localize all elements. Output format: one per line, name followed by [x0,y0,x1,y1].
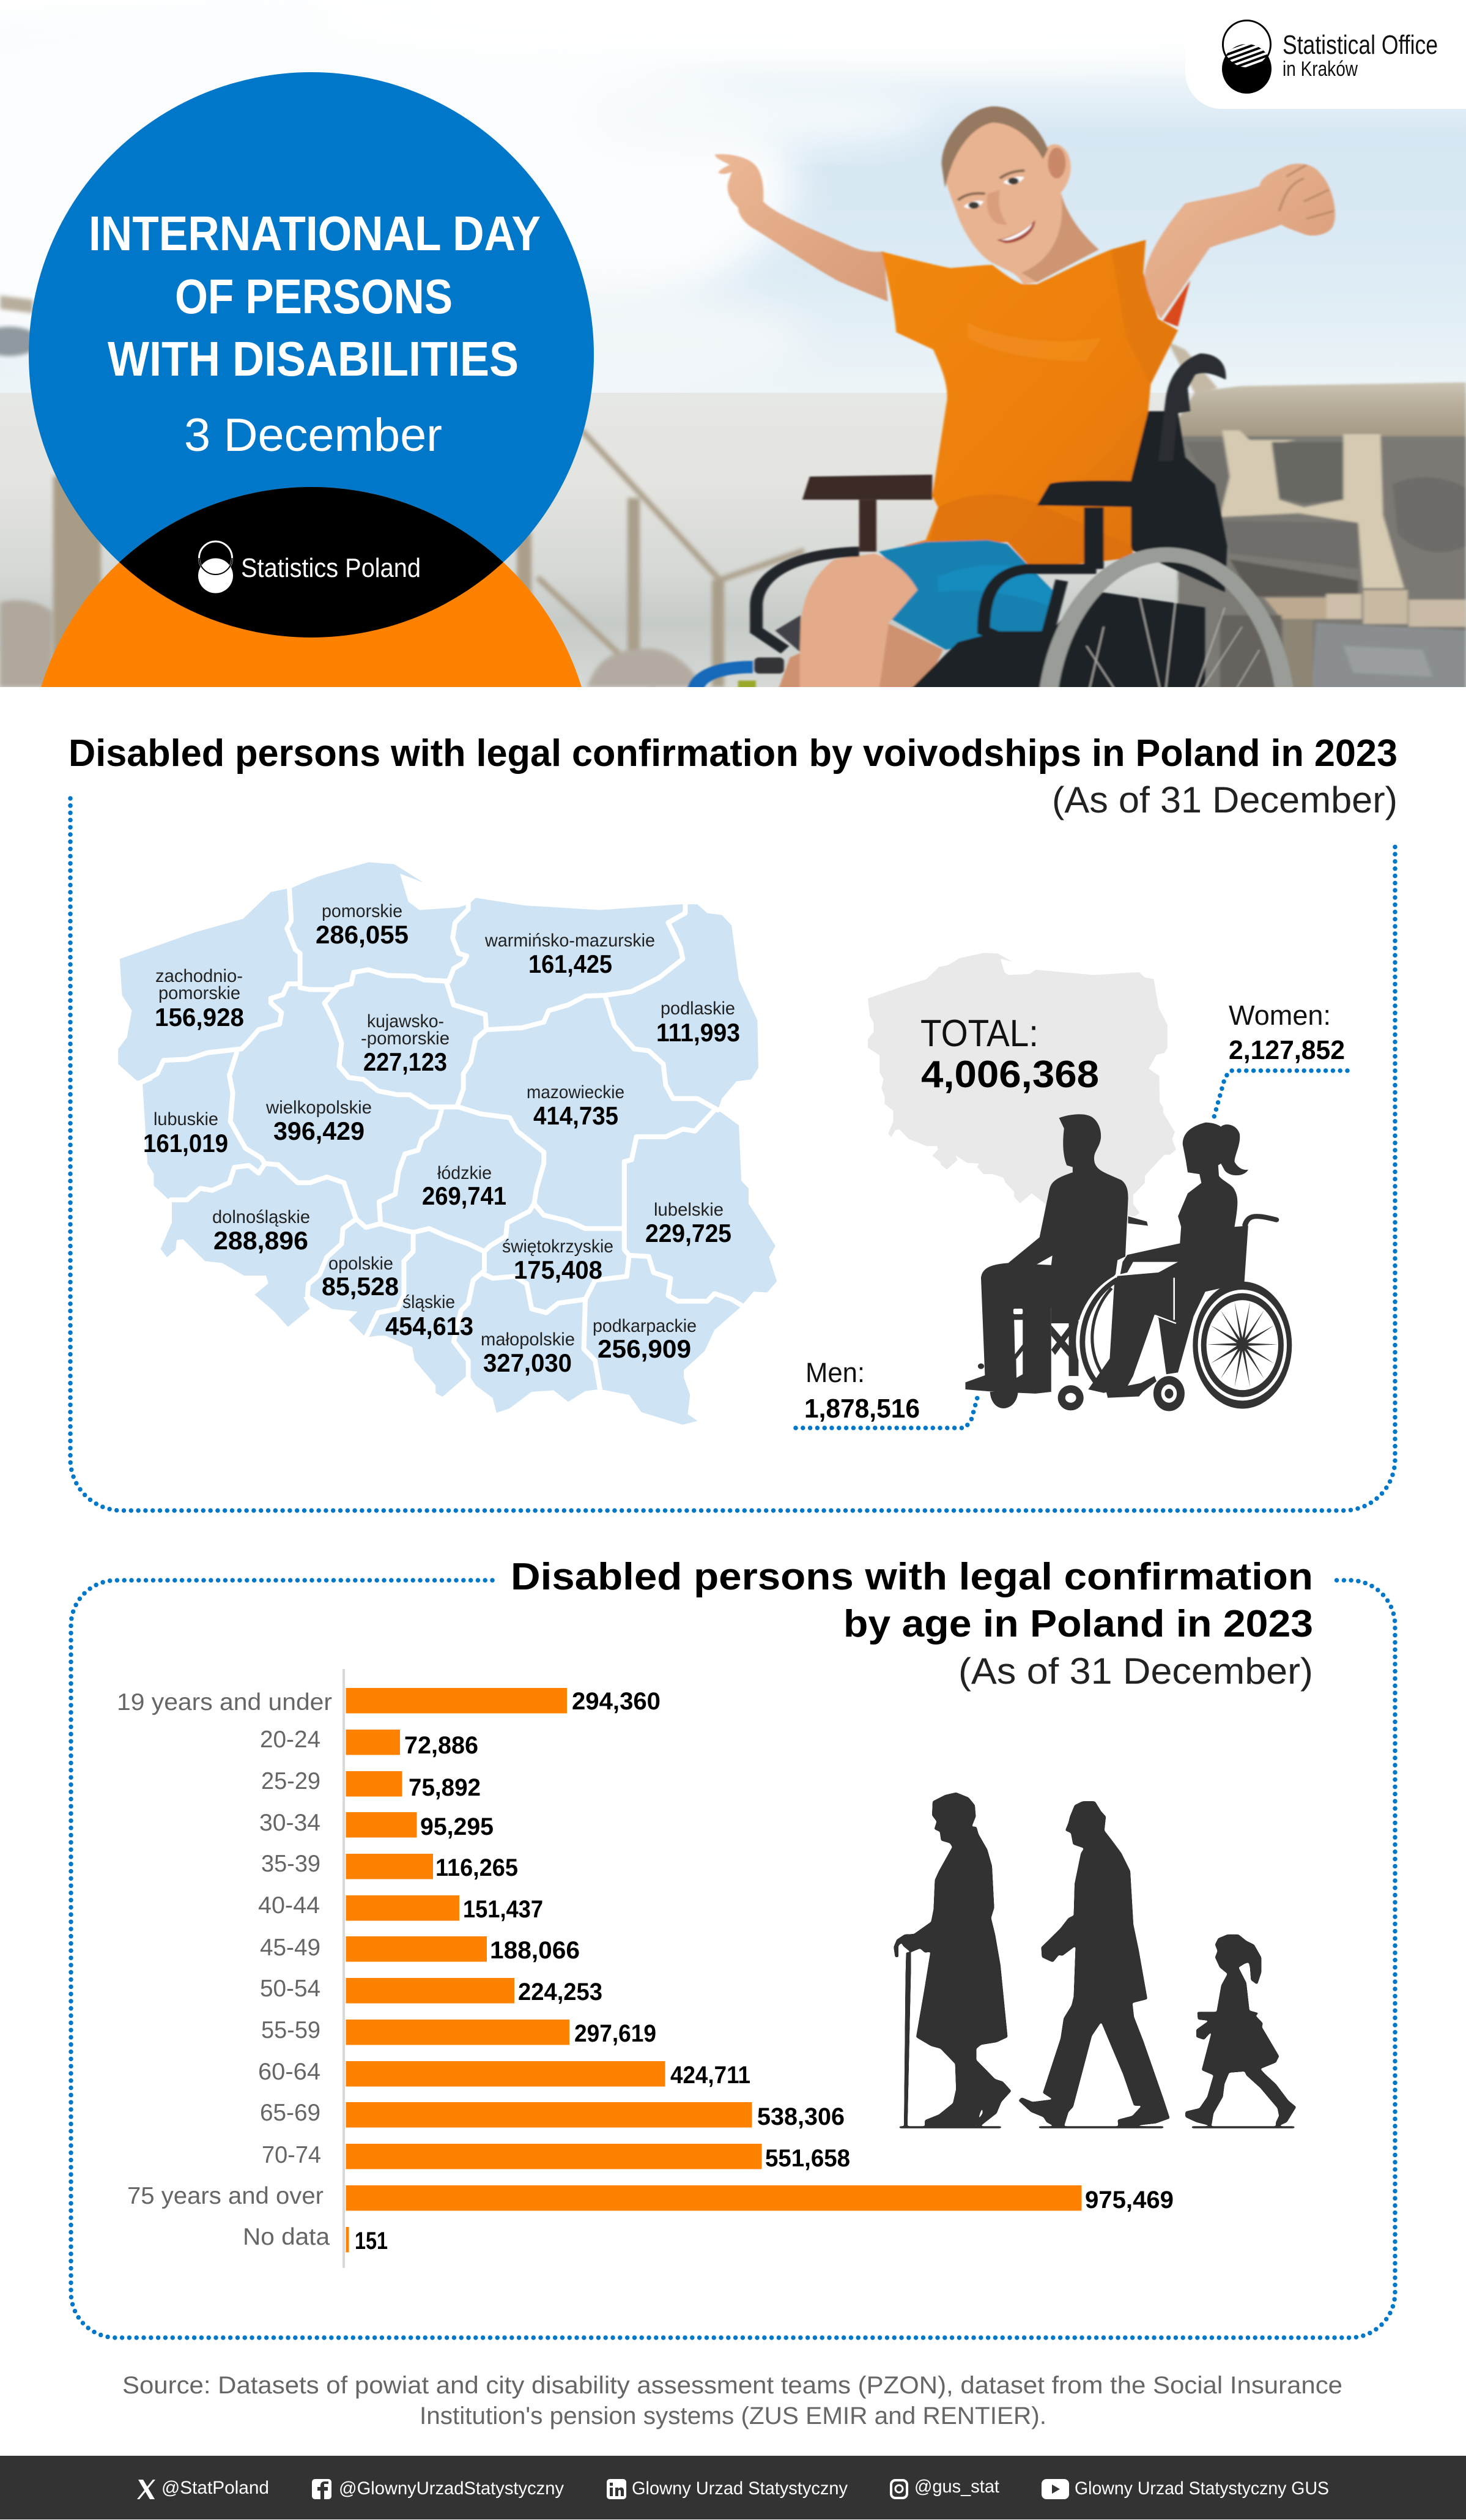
bar: 55-59 [261,2017,656,2047]
label: wielkopolskie [265,1098,372,1145]
label: śląskie [385,1292,473,1340]
label: lubelskie [645,1200,731,1247]
bar: 19 years and under: 294,360 [572,1688,661,1715]
label: dolnośląskie: dolnośląskie [212,1207,310,1227]
label: kujawsko-pomorskie: 227,123 [363,1047,447,1076]
label: dolnośląskie: 288,896 [213,1226,308,1255]
heading: age section [511,1556,1313,1645]
social: YouTube: Glowny Urzad Statystyczny GUS [1075,2478,1329,2499]
blurred railing and rocks [0,295,804,687]
bar: 65-69: 538,306 [757,2103,845,2130]
men figure [804,1357,920,1424]
panel frame: voivodships [70,798,1395,1511]
men figure: Men: [805,1357,865,1388]
heading: international day [89,206,541,386]
label: pomorskie [316,901,409,949]
silhouette: elderly man [1018,1801,1170,2128]
blue circle [29,72,594,637]
back chair wheel [1083,1279,1117,1388]
bar: 19 years and under [117,1688,661,1715]
women leader line [1213,1071,1347,1121]
label: podlaskie: 111,993 [656,1018,740,1047]
blue front frame [695,658,784,692]
push handle [1158,354,1226,461]
right armrest [1037,481,1181,569]
bar: no data: 151 [355,2228,388,2254]
grey Poland silhouette behind total [868,953,1176,1216]
bar: 40-44: 151,437 [463,1896,543,1923]
man silhouette [965,1114,1128,1394]
label: podlaskie [656,998,740,1047]
label: wielkopolskie: 396,429 [273,1117,365,1145]
label: małopolskie: 327,030 [483,1348,572,1377]
social: X: @StatPoland [161,2478,269,2498]
label: lubelskie: 229,725 [645,1219,731,1247]
label: świętokrzyskie [502,1236,613,1284]
label: warmińsko-mazurskie: 161,425 [528,950,612,978]
bar: 25-29 [261,1768,481,1801]
social: Facebook: @GlownyUrzadStatystyczny [339,2478,564,2499]
stone wall [1168,342,1466,691]
social: LinkedIn: Glowny Urzad Statystyczny [632,2478,848,2499]
label: łódzkie [422,1163,506,1210]
bar: 35-39: 35-39 [261,1851,320,1877]
label: małopolskie [481,1329,575,1377]
date: 3 December: 3 December [184,409,442,461]
panel frame: age [71,1580,1395,2338]
man cut-outs [1013,1255,1053,1378]
woman foot rest [1106,1376,1157,1398]
label: kujawsko-pomorskie: -pomorskie [361,1028,450,1049]
label: śląskie: 454,613 [385,1312,473,1340]
woman chair frame gap [1135,1277,1176,1372]
left side guard [757,552,859,650]
icon: overlapping circles [198,541,233,593]
subheading: as of date: (As of 31 December) [958,1651,1313,1692]
bar: 25-29: 25-29 [261,1768,320,1794]
label: pomorskie: 286,055 [316,920,409,949]
bar: 19 years and under: 19 years and under [117,1689,332,1715]
logo panel: Statistical Office in Kraków [1185,0,1466,109]
bar: 75 years and over: 75 years and over [127,2183,324,2209]
back chair wheel arc [1081,1279,1117,1388]
label: warmińsko-mazurskie: warmińsko-mazurskie [484,931,655,951]
bar chart: persons by age [117,1669,1174,2268]
blue shorts [879,540,1054,650]
label: łódzkie: łódzkie [437,1163,492,1183]
bar: 70-74: 70-74 [262,2142,321,2168]
bar: 30-34 [259,1810,494,1840]
axis [342,1669,345,2268]
heading: international day: INTERNATIONAL DAY [89,206,541,261]
bar: 50-54: 224,253 [518,1979,602,2005]
left arm [715,154,888,302]
label: warmińsko-mazurskie [484,931,655,978]
heading: voivodships section: Disabled persons with legal confirmation by voivodships in Poland in 2023 [68,732,1398,775]
seat cushion [775,615,801,652]
head and face [943,107,1099,284]
bar: 50-54 [260,1975,602,2005]
bar: 65-69: 65-69 [260,2100,320,2126]
label: dolnośląskie [212,1207,310,1255]
label: zachodniopomorskie: zachodnio- [155,966,243,986]
bar: 40-44 [258,1892,543,1923]
men leader line [796,1396,978,1428]
total figure [920,1013,1099,1096]
bar: 60-64: 60-64 [258,2059,320,2085]
heading: age section: by age in Poland in 2023 [843,1603,1313,1645]
women figure: Women: [1229,1000,1331,1031]
bar: 20-24: 20-24 [260,1726,320,1753]
label: kujawsko-pomorskie: kujawsko- [367,1011,444,1031]
label: podlaskie: podlaskie [661,998,735,1019]
bar: 45-49 [260,1935,580,1964]
label: świętokrzyskie: 175,408 [514,1255,602,1284]
label: lubuskie: lubuskie [154,1109,218,1129]
men figure: 1,878,516 [804,1394,920,1424]
silhouette: girl [1185,1935,1296,2128]
bar: 55-59: 297,619 [574,2020,656,2047]
bar: no data: No data [243,2224,330,2250]
woman silhouette [1088,1123,1248,1393]
office city: in Kraków [1283,58,1358,81]
bar: 25-29: 75,892 [409,1774,481,1801]
bar: 55-59: 55-59 [261,2017,320,2043]
total figure: TOTAL: [920,1013,1038,1055]
orange circle [29,487,594,1052]
label: lubuskie: 161,019 [143,1129,228,1158]
bar: 45-49: 45-49 [260,1935,320,1961]
front caster [1153,1376,1185,1411]
label: łódzkie: 269,741 [422,1181,506,1210]
bar: 35-39: 116,265 [435,1854,518,1881]
footer bar [0,2456,1466,2519]
heading: age section: Disabled persons with legal confirmation [511,1556,1313,1598]
source note: Institution's pension systems (ZUS EMIR and RENTIER). [420,2403,1046,2429]
bar: 45-49: 188,066 [490,1937,580,1964]
social: Instagram: @gus_stat [914,2477,1000,2497]
lower leg [777,619,943,691]
icon: elderly woman, elderly man and child walking [894,1793,1296,2128]
label: podkarpackie: 256,909 [598,1334,691,1363]
bar: 70-74 [262,2142,850,2172]
subheading: as of date: (As of 31 December) [1052,779,1398,820]
bar: 60-64 [258,2059,750,2089]
logo: Statistics Poland [198,541,421,593]
woman chair handle [1245,1216,1276,1225]
bar: 40-44: 40-44 [258,1892,320,1919]
bar: 50-54: 50-54 [260,1975,320,2002]
right side guard and seat frame [909,592,1205,691]
bar: 20-24: 72,886 [404,1732,478,1759]
label: świętokrzyskie: świętokrzyskie [502,1236,613,1257]
bar: 65-69 [260,2100,845,2130]
women figure [1229,1000,1345,1065]
label: lubelskie: lubelskie [654,1200,724,1220]
left armrest [802,475,932,552]
bar: 60-64: 424,711 [670,2062,750,2089]
label: zachodniopomorskie [155,966,244,1031]
heading: international day: OF PERSONS [175,269,453,324]
label: opolskie: 85,528 [322,1272,399,1301]
bar: 30-34: 30-34 [259,1810,320,1836]
big wheel [1193,1282,1292,1409]
bar: 70-74: 551,658 [765,2145,850,2172]
bar: 30-34: 95,295 [420,1813,494,1840]
man and wheelchair illustration [686,105,1466,687]
icon: statistical office [1222,21,1272,94]
black overlap lens [29,487,594,1052]
label: śląskie: śląskie [402,1292,455,1312]
heading: international day: WITH DISABILITIES [108,332,519,386]
man's chair frame [978,1216,1148,1410]
label: podkarpackie: podkarpackie [593,1316,697,1336]
source note [122,2372,1342,2429]
bar: 35-39 [261,1851,518,1881]
icon: man and woman in wheelchairs [965,1114,1292,1411]
map: Poland voivodships [118,862,777,1425]
orange shirt [881,240,1178,569]
silhouette: elderly woman with cane [894,1793,1012,2128]
big wheel with spokes [1046,555,1287,891]
photo background: sky and sea [0,0,1466,687]
backrest and bag [1131,411,1227,592]
upper thigh [800,554,917,691]
bar: 75 years and over: 975,469 [1085,2187,1174,2213]
bar: 75 years and over [127,2183,1174,2213]
label: pomorskie: pomorskie [322,901,402,921]
hero photo: man in wheelchair by the sea [0,64,1466,687]
bar: 20-24 [260,1726,478,1759]
label: lubuskie [143,1109,228,1158]
label: mazowieckie: 414,735 [533,1101,618,1130]
label: podkarpackie [593,1316,697,1363]
right arm and fist [1145,164,1335,319]
label: zachodniopomorskie: pomorskie [158,983,240,1003]
label: mazowieckie: mazowieckie [527,1082,624,1102]
label: zachodniopomorskie: 156,928 [155,1003,244,1031]
label: opolskie [322,1254,399,1301]
label: wielkopolskie: wielkopolskie [265,1098,372,1118]
label: kujawsko-pomorskie [361,1011,450,1076]
label: mazowieckie [527,1082,624,1130]
total figure: 4,006,368 [921,1054,1099,1096]
bar: no data [243,2224,388,2254]
label: małopolskie: małopolskie [481,1329,575,1350]
women figure: 2,127,852 [1229,1035,1345,1065]
source note: Source: Datasets of powiat and city disability assessment teams (PZON), dataset from the Social Insurance [122,2372,1342,2399]
logo wordmark: Statistics Poland [241,553,421,583]
label: opolskie: opolskie [328,1254,393,1274]
